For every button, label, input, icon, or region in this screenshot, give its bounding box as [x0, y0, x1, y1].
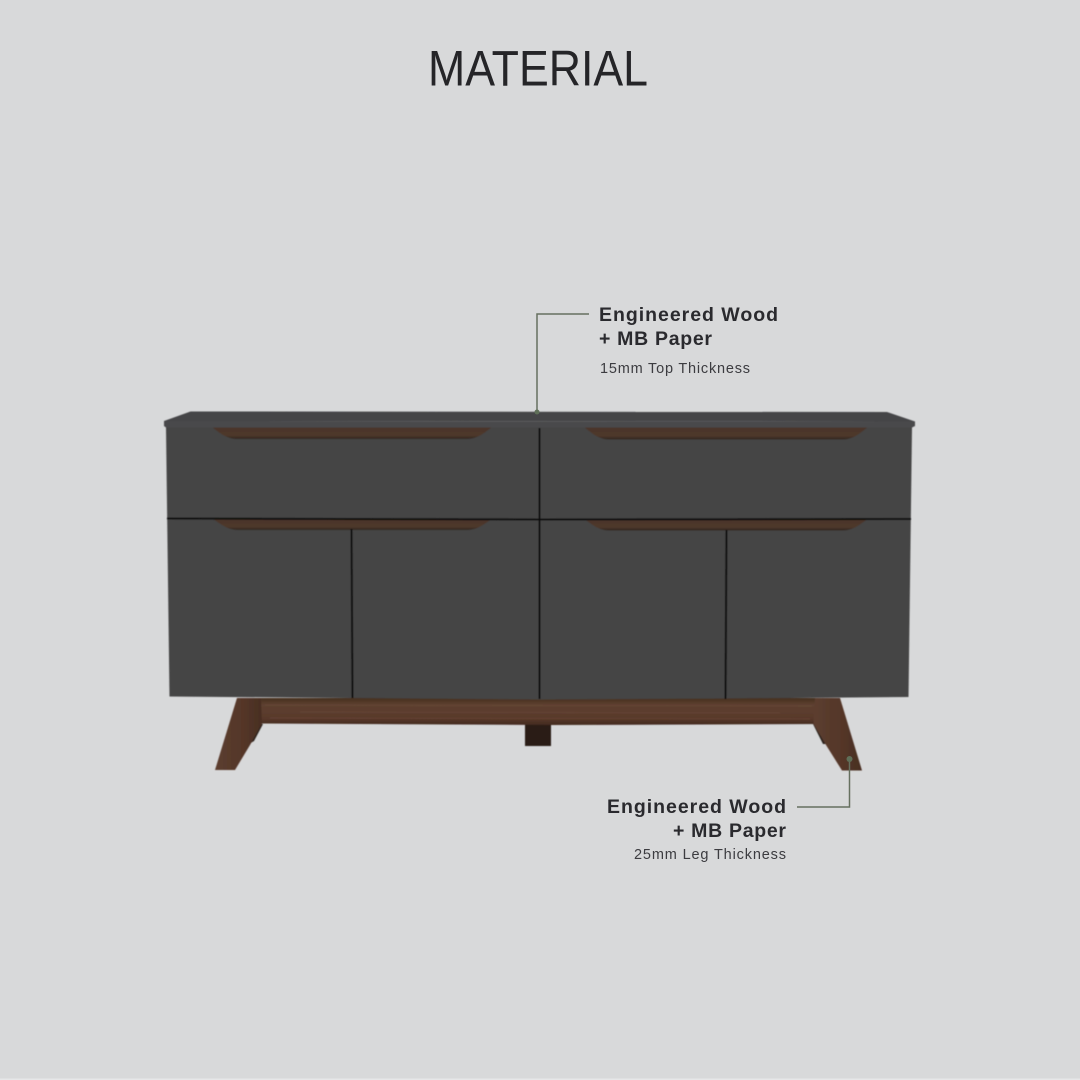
wood base rail	[250, 698, 830, 725]
cabinet body	[166, 427, 912, 700]
back leg shadows	[249, 724, 829, 744]
centre leg	[525, 724, 551, 746]
label: leg material: + MB Paper	[673, 820, 786, 842]
left leg	[215, 698, 262, 770]
title: MATERIAL	[428, 40, 648, 96]
label: top material: Engineered Wood	[599, 304, 778, 326]
leader line: top	[534, 314, 589, 414]
label: leg material: 25mm Leg Thickness	[634, 847, 786, 863]
label: leg material	[607, 796, 786, 863]
right leg	[814, 698, 862, 770]
label: top material: + MB Paper	[599, 328, 712, 350]
tabletop	[164, 412, 915, 428]
label: leg material: Engineered Wood	[607, 796, 786, 818]
drawer handle recesses	[212, 427, 868, 530]
label: top material: 15mm Top Thickness	[600, 361, 750, 377]
panel gap lines	[167, 428, 911, 699]
label: top material	[599, 304, 778, 377]
sideboard	[164, 412, 915, 770]
leader line: leg	[797, 756, 852, 807]
